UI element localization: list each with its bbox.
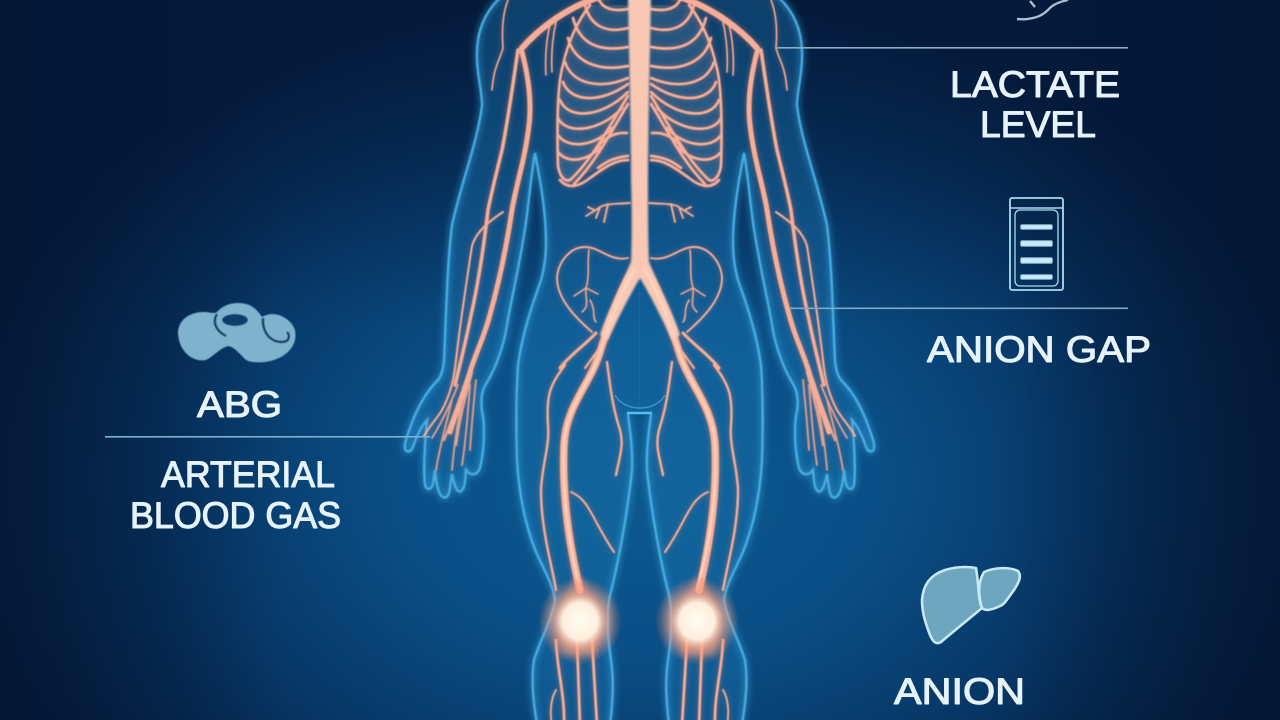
leader line top right bbox=[775, 47, 1128, 49]
leader line left bbox=[105, 436, 430, 438]
aorta bbox=[600, 0, 680, 340]
icon: lungs bbox=[178, 303, 296, 362]
icon: cropped curve bbox=[1017, 0, 1068, 19]
callout: anion liver bbox=[894, 567, 1025, 712]
label: arterial blood gas: BLOOD GAS bbox=[130, 495, 341, 536]
leader line mid right bbox=[790, 308, 1128, 309]
label: lactate level: LEVEL bbox=[980, 104, 1096, 145]
arterial network bbox=[424, 0, 855, 720]
icon: liver bbox=[922, 567, 1020, 643]
label: anion gap: ANION GAP bbox=[927, 329, 1151, 370]
label: arterial blood gas: ARTERIAL bbox=[161, 454, 335, 495]
rib cage shading bbox=[558, 5, 721, 186]
icon: report panel bbox=[1010, 198, 1063, 290]
label: lactate level bbox=[950, 64, 1120, 145]
knee glow right bbox=[655, 577, 739, 665]
callout: lactate level bbox=[775, 0, 1128, 145]
knee glow left bbox=[538, 577, 622, 665]
knee funnel bbox=[558, 578, 719, 655]
femoral highlights bbox=[564, 270, 715, 590]
body silhouette bbox=[405, 0, 874, 720]
callout: ABG bbox=[105, 303, 430, 536]
label: anion: ANION bbox=[894, 671, 1025, 712]
human body figure bbox=[405, 0, 874, 720]
label: lactate level: LACTATE bbox=[950, 64, 1120, 105]
label: ABG: ABG bbox=[197, 384, 282, 425]
callout: anion gap bbox=[790, 198, 1151, 370]
label: arterial blood gas bbox=[130, 454, 341, 536]
